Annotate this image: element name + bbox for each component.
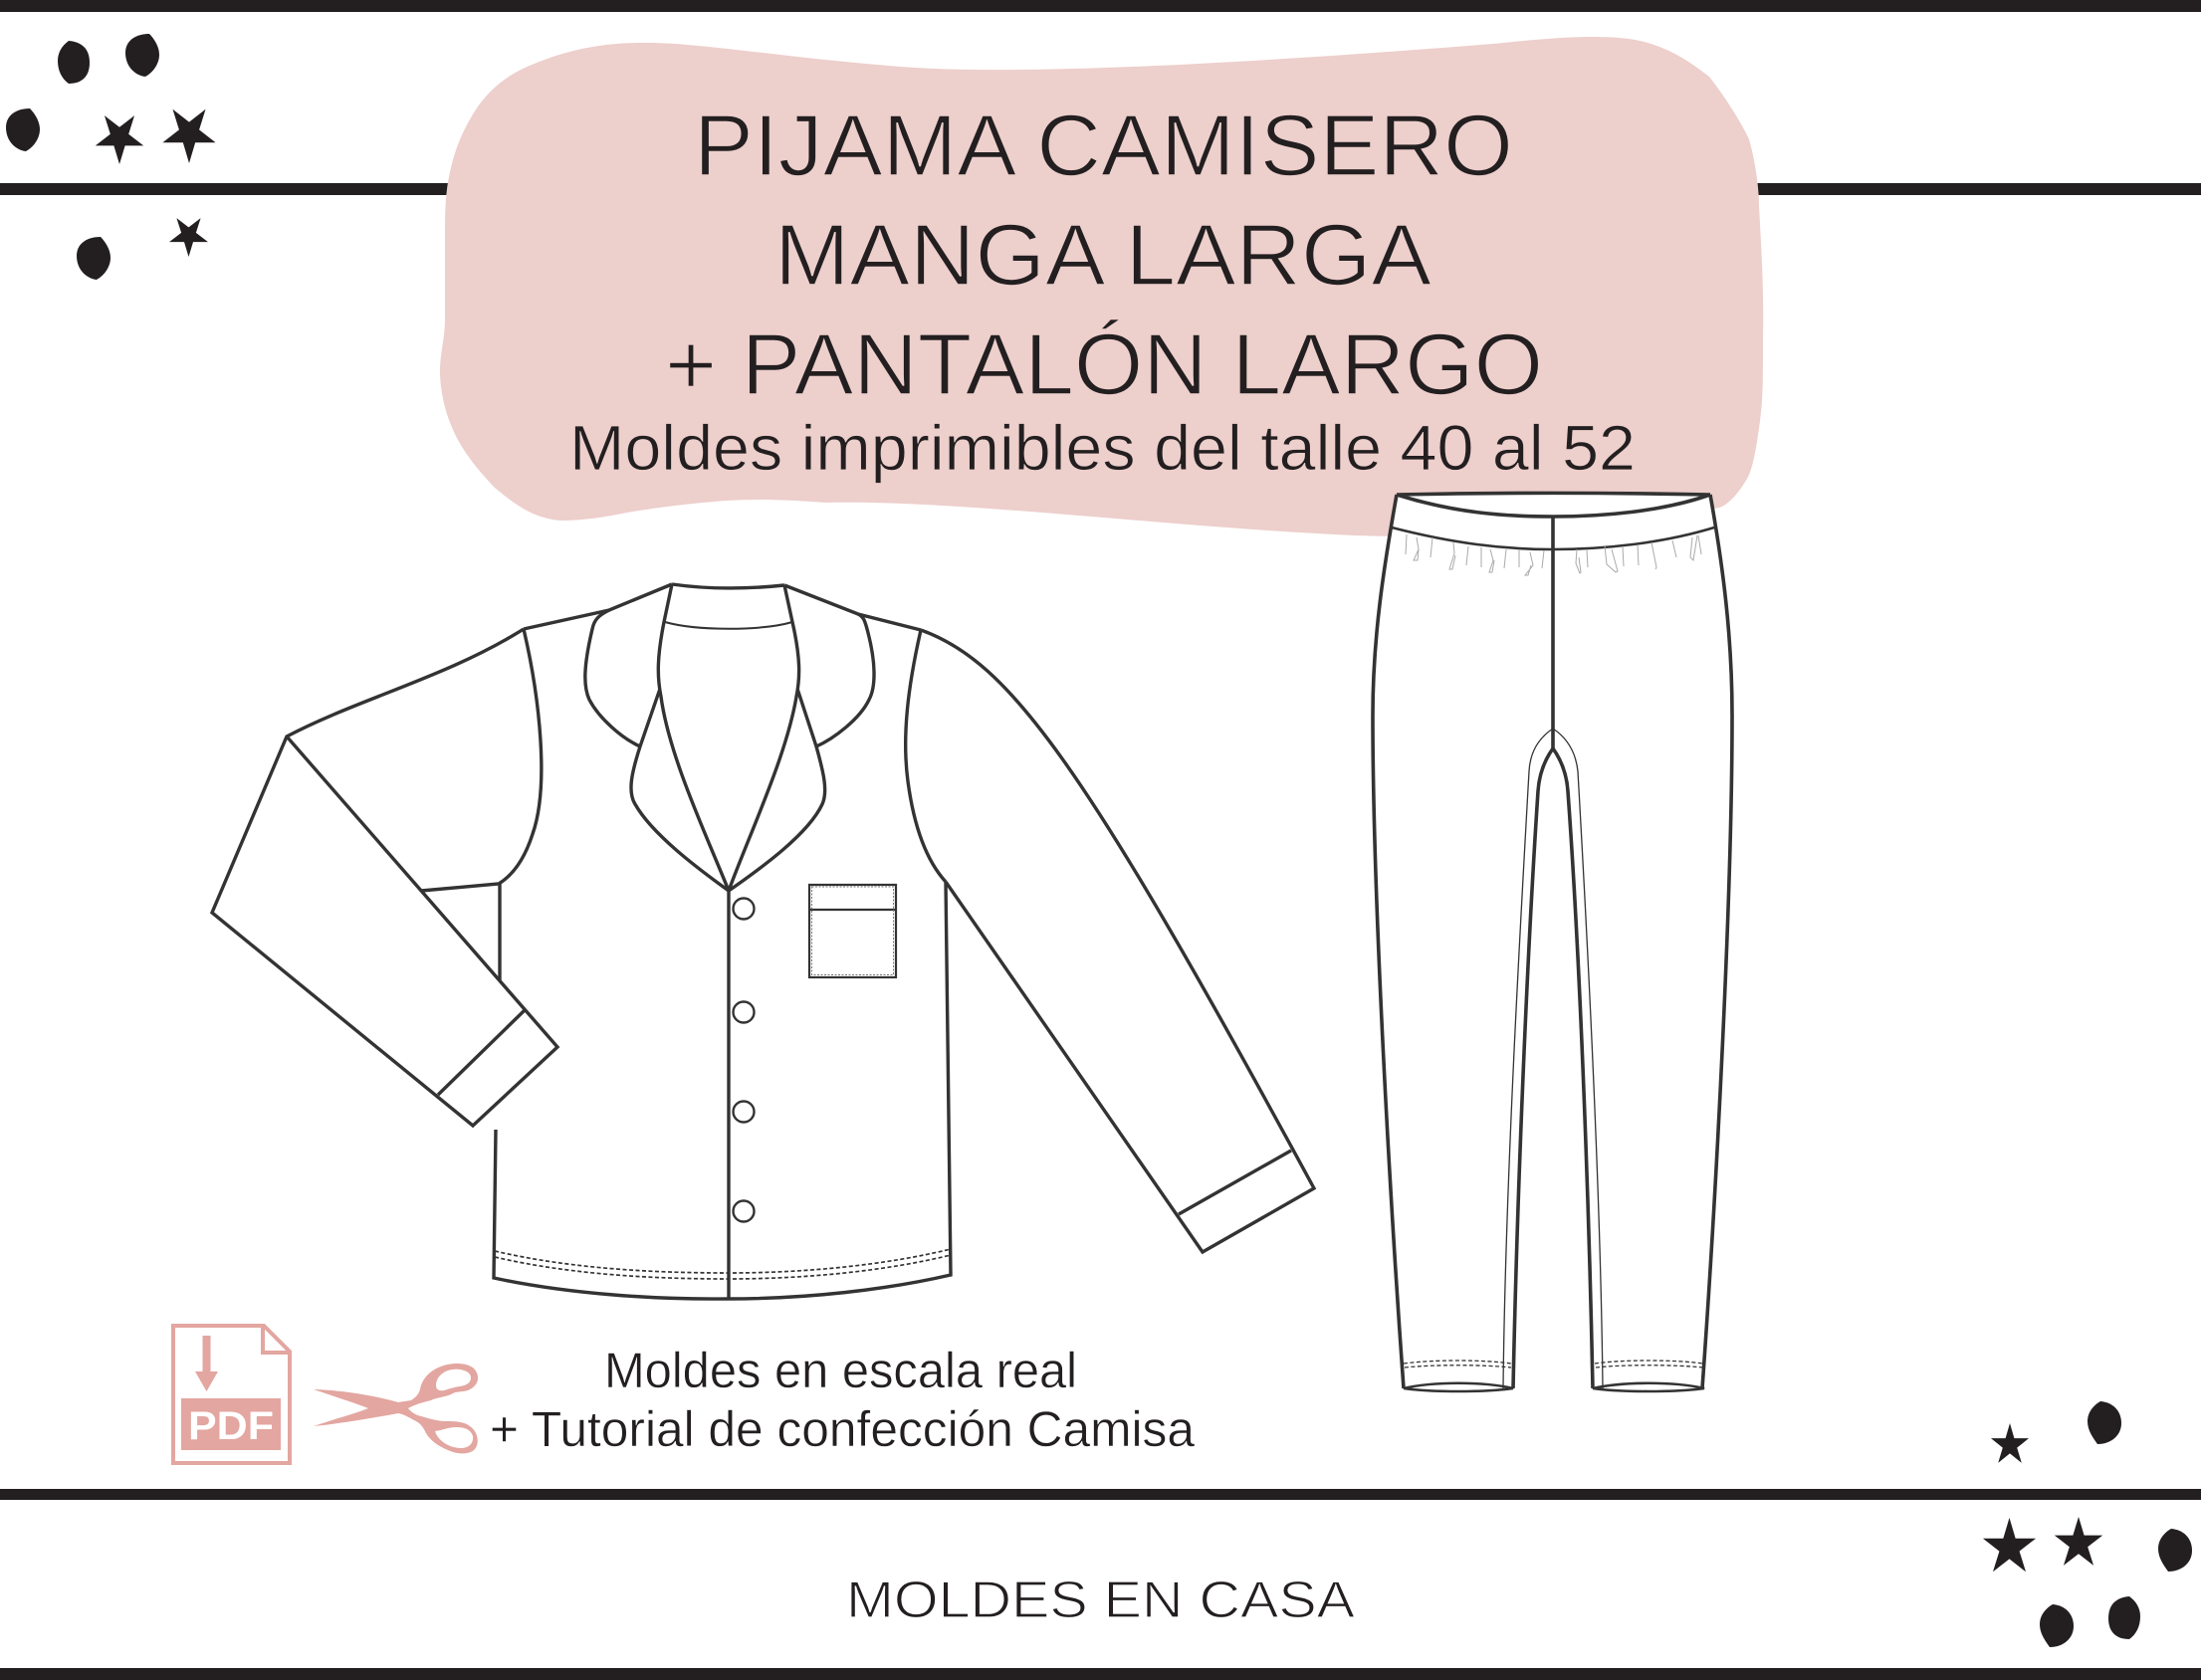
pants: waist gathers	[1406, 534, 1701, 575]
pants drawing	[1373, 494, 1732, 1391]
title: + PANTALÓN LARGO	[665, 316, 1543, 413]
shirt: left cuff seam	[438, 1010, 525, 1095]
decoration: bottom-right dots and stars	[1983, 1401, 2192, 1647]
subtitle: Moldes imprimibles del talle 40 al 52	[569, 412, 1636, 484]
pdf: page outline	[173, 1326, 290, 1463]
shirt: shoulders	[524, 584, 921, 630]
pants: white silhouette	[1373, 494, 1732, 1388]
shirt: right armhole	[906, 630, 946, 882]
shirt: left armhole and underarm	[421, 629, 542, 980]
shirt: pocket	[809, 885, 896, 977]
bottom bars	[0, 1489, 2201, 1680]
pants: hem stitching	[1404, 1361, 1703, 1367]
shirt: right cuff seam	[1179, 1151, 1291, 1214]
icon: scissors	[314, 1364, 478, 1453]
title	[665, 98, 1543, 413]
title: MANGA LARGA	[774, 207, 1431, 304]
shirt: back neck	[672, 584, 784, 588]
caption: + Tutorial de confección Camisa	[490, 1401, 1195, 1457]
title blob	[440, 37, 1763, 536]
pdf: download arrow	[195, 1336, 218, 1391]
brand name: MOLDES EN CASA	[846, 1572, 1355, 1629]
pants: inner legs	[1513, 748, 1593, 1388]
shirt: body sides and hem	[494, 882, 951, 1299]
caption: Moldes en escala real	[604, 1343, 1077, 1398]
shirt: left collar	[585, 610, 640, 746]
shirt: right collar	[816, 614, 874, 746]
top bars	[0, 0, 2201, 195]
pants: inseam stitching	[1503, 729, 1603, 1388]
caption	[490, 1343, 1195, 1457]
pants: centre seam	[1551, 517, 1555, 748]
shirt: inner neck	[665, 622, 792, 629]
shirt: right lapel	[729, 689, 825, 891]
decoration: top-left dots and stars	[6, 34, 216, 280]
pants: leg hems	[1404, 1383, 1704, 1391]
pants: left outer leg	[1373, 495, 1404, 1388]
pants: waistband top opening	[1397, 494, 1710, 517]
pdf: label box	[181, 1398, 281, 1450]
shirt drawing	[212, 584, 1314, 1299]
shirt: neckline right	[729, 585, 799, 891]
shirt: hem stitching	[495, 1249, 951, 1279]
shirt: right sleeve	[921, 630, 1314, 1252]
icon: pdf file	[173, 1326, 290, 1463]
shirt: left sleeve	[212, 629, 557, 1126]
shirt: buttons	[733, 898, 755, 1222]
pants: right outer leg	[1702, 495, 1732, 1388]
pants: waistband lower seam	[1392, 527, 1714, 549]
shirt: button placket	[727, 891, 731, 1299]
pdf: label text: PDF	[188, 1404, 274, 1448]
shirt: left lapel	[631, 689, 729, 891]
title: PIJAMA CAMISERO	[694, 98, 1513, 194]
shirt: neckline left	[658, 584, 729, 891]
